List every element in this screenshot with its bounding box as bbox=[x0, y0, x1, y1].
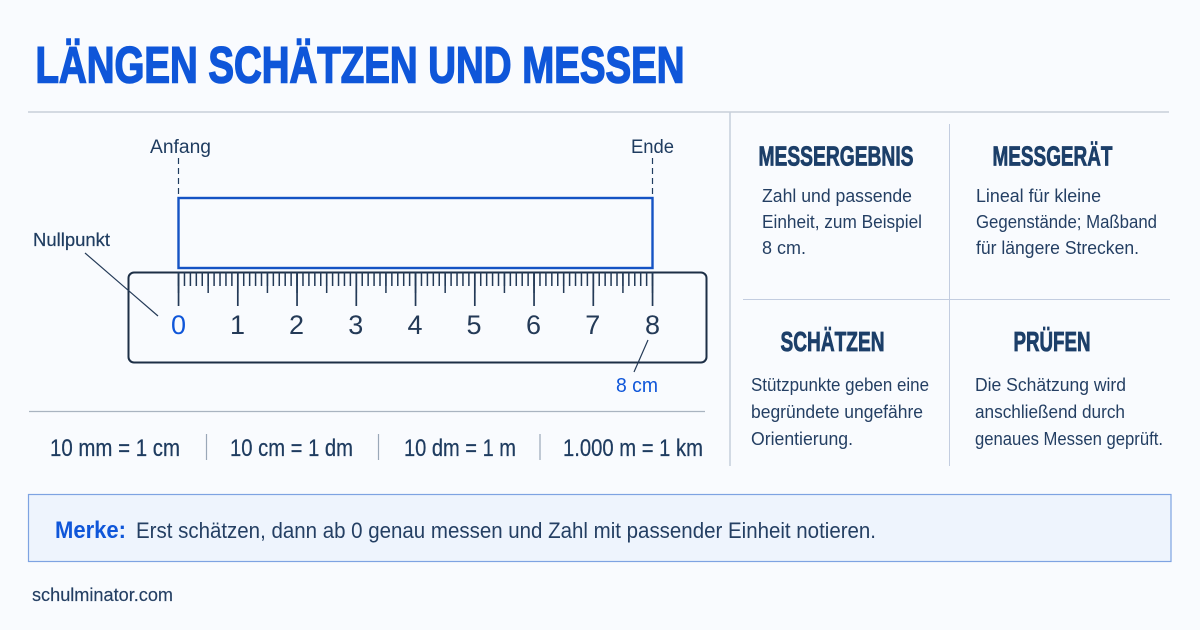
ruler numbers: 4 bbox=[407, 310, 423, 340]
text: Messergebnis: 8 cm. bbox=[762, 237, 806, 258]
ruler numbers: 1 bbox=[230, 310, 245, 340]
text: Schätzen: begründete ungefähre bbox=[751, 401, 923, 422]
dashed marker: end bbox=[652, 158, 654, 196]
heading: Prüfen: PRÜFEN bbox=[1014, 326, 1090, 357]
text: Prüfen: anschließend durch bbox=[975, 401, 1125, 422]
unit conversions: 1.000 m = 1 km bbox=[563, 435, 703, 462]
ruler numbers: 6 bbox=[526, 310, 541, 340]
text: Messgerät bbox=[976, 185, 1157, 258]
text: Messergebnis bbox=[762, 185, 922, 258]
panel: Messgerät bbox=[976, 140, 1157, 258]
ruler numbers: 7 bbox=[585, 310, 600, 340]
ruler numbers: 8 bbox=[645, 310, 660, 340]
heading: Schätzen: SCHÄTZEN bbox=[780, 326, 884, 357]
leader: 8 cm bbox=[634, 340, 648, 372]
footer: schulminator.com bbox=[32, 585, 173, 605]
unit conversions: 10 mm = 1 cm bbox=[50, 435, 180, 462]
label: Nullpunkt: Nullpunkt bbox=[33, 230, 110, 250]
measured object bbox=[178, 198, 652, 268]
callout: Merke: Erst schätzen, dann ab 0 genau messen und Zahl mit passender Einheit notieren. bbox=[136, 518, 876, 543]
dashed marker: start bbox=[178, 158, 180, 196]
text: Prüfen: genaues Messen geprüft. bbox=[975, 428, 1163, 449]
label: Ende: Ende bbox=[631, 137, 674, 158]
text: Messgerät: Lineal für kleine bbox=[976, 185, 1101, 206]
panel: Prüfen bbox=[975, 326, 1163, 449]
label: Anfang: Anfang bbox=[150, 137, 211, 158]
title: LÄNGEN SCHÄTZEN UND MESSEN bbox=[36, 36, 684, 94]
text: Messgerät: Gegenstände; Maßband bbox=[976, 211, 1157, 232]
panel: Messergebnis bbox=[758, 140, 922, 258]
heading: Messergebnis: MESSERGEBNIS bbox=[758, 140, 914, 172]
text: Prüfen bbox=[975, 374, 1163, 449]
unit conversions: 10 cm = 1 dm bbox=[230, 435, 353, 462]
ruler diagram bbox=[33, 137, 706, 397]
ruler numbers: 3 bbox=[348, 310, 363, 340]
ruler numbers: 5 bbox=[466, 310, 482, 340]
text: Messergebnis: Einheit, zum Beispiel bbox=[762, 211, 922, 232]
panel: Schätzen bbox=[751, 326, 929, 449]
heading: Messgerät: MESSGERÄT bbox=[992, 140, 1113, 172]
ruler numbers: 2 bbox=[289, 310, 304, 340]
label: 8 cm: 8 cm bbox=[616, 375, 658, 397]
callout: Merke: Merke: bbox=[55, 517, 126, 544]
leader: Nullpunkt bbox=[85, 253, 158, 316]
ruler body bbox=[128, 272, 706, 362]
ruler numbers: 0 bbox=[171, 310, 186, 340]
text: Messergebnis: Zahl und passende bbox=[762, 185, 912, 206]
unit conversions bbox=[50, 434, 703, 462]
ruler numbers bbox=[171, 310, 660, 340]
callout: Merke bbox=[28, 494, 1171, 562]
unit conversions: 10 dm = 1 m bbox=[404, 435, 516, 462]
text: Prüfen: Die Schätzung wird bbox=[975, 374, 1126, 395]
text: Schätzen bbox=[751, 374, 929, 449]
text: Messgerät: für längere Strecken. bbox=[976, 237, 1139, 258]
text: Schätzen: Stützpunkte geben eine bbox=[751, 374, 929, 395]
text: Schätzen: Orientierung. bbox=[751, 428, 853, 449]
ruler ticks bbox=[178, 279, 653, 289]
